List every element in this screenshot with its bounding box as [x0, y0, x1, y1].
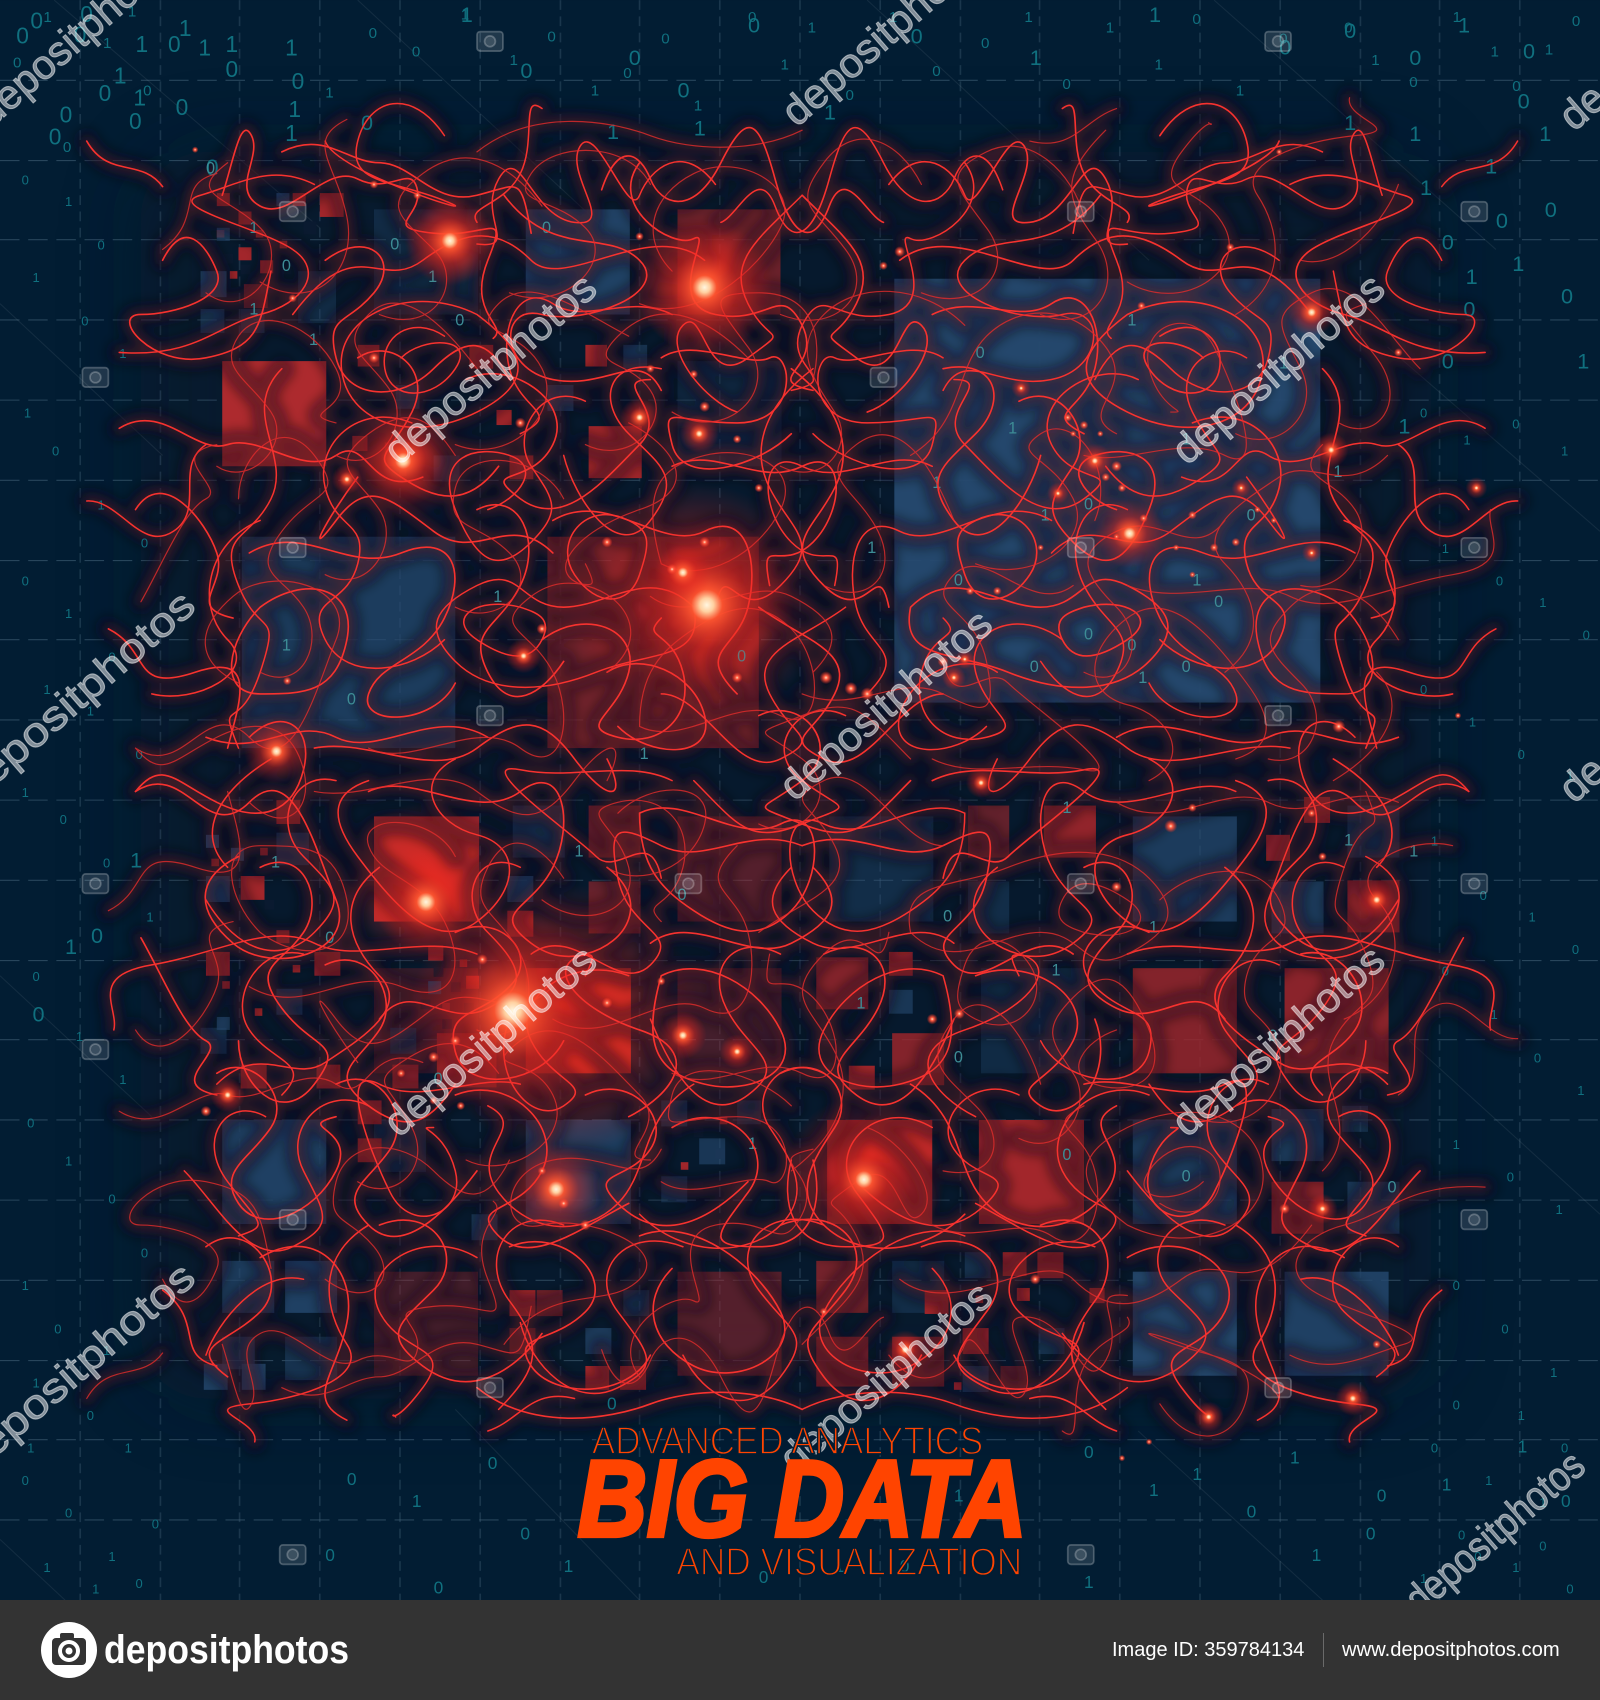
- binary digits: 0000101111010000000111: [16, 1, 304, 181]
- curve dark halos: [87, 98, 1518, 1442]
- red light washes: [344, 197, 945, 1258]
- title: big data: BIG DATA: [578, 1438, 1027, 1559]
- binary digits: 0101010010110101001011010: [325, 1393, 1571, 1598]
- pixel clusters: [206, 193, 1330, 1390]
- data squares: [201, 193, 1399, 1392]
- binary digits: 0101010101011001010100101010110100101: [33, 2, 1589, 1026]
- dark centre: [141, 152, 1431, 1399]
- footer divider: [1323, 1633, 1324, 1667]
- watermark text: depositphotos: [375, 936, 605, 1145]
- small particles: [192, 146, 1461, 1461]
- binary digits: 01011010011010010110100101101001011010: [13, 3, 1580, 156]
- large blue square: [894, 279, 1320, 703]
- large red square centre: [547, 537, 759, 748]
- watermark text: depositphotos: [770, 1272, 1001, 1481]
- red squares: [222, 209, 1399, 1387]
- watermark text: depositphotos: [1163, 264, 1393, 473]
- image id: Image ID: 359784134: [1112, 1639, 1304, 1661]
- bright nodes: [210, 195, 1487, 1432]
- binary digits: 010110100101101010010110100101101001010101101001011: [206, 160, 1418, 1197]
- watermark text: depositphotos: [375, 264, 605, 473]
- website url: www.depositphotos.com: [1342, 1639, 1560, 1661]
- title line: advanced analytics: ADVANCED ANALYTICS: [592, 1420, 983, 1463]
- footer logo icon: [41, 1622, 97, 1678]
- large blue square left: [242, 537, 455, 748]
- footer bar: [0, 1600, 1600, 1700]
- title line: and visualization: AND VISUALIZATION: [676, 1541, 1022, 1584]
- curve red halos: [87, 98, 1518, 1442]
- watermark text: depositphotos: [1163, 936, 1393, 1145]
- title block: [578, 1420, 1027, 1584]
- watermark text: depositphotos: [770, 600, 1001, 809]
- watermark camera icons: [82, 32, 1487, 1564]
- binary digits: 01011010010110100101101001011010010100: [1420, 405, 1590, 1597]
- flowing red curves: [87, 98, 1518, 1442]
- blue squares: [222, 209, 1399, 1380]
- binary digits: 01010110100101101001011010010110100101101: [22, 172, 159, 1597]
